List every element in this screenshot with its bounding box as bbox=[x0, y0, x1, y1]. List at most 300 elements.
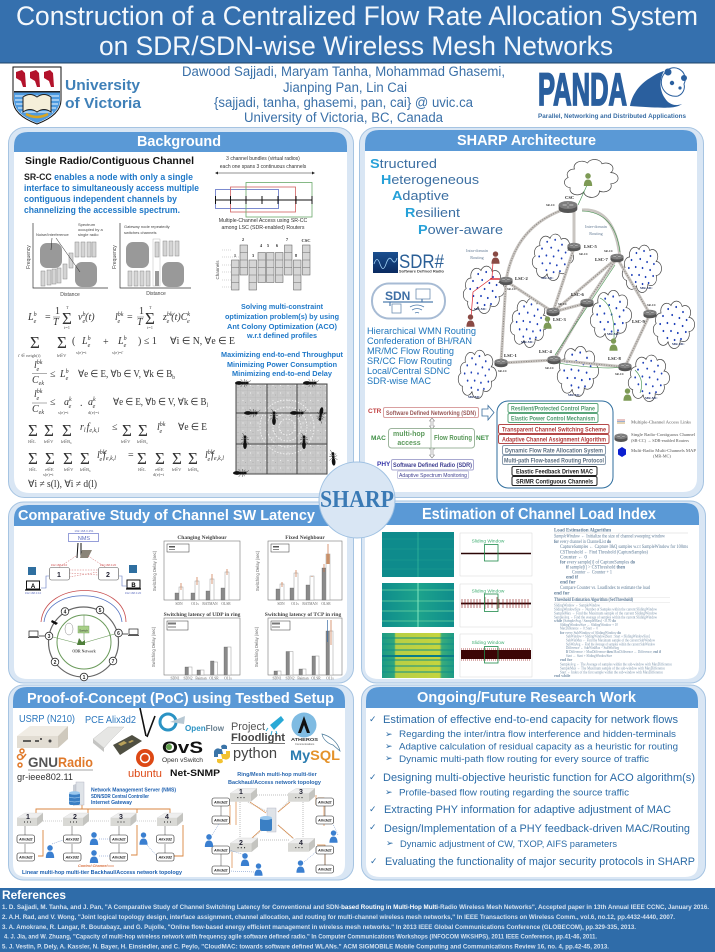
logo: GNU Radio: Radio bbox=[58, 754, 93, 770]
heading: Estimation of Channel Load Index bbox=[422, 506, 656, 523]
chart: noise and interference spectrum: occupied by a bbox=[78, 227, 103, 232]
equations: d(e)=i bbox=[88, 410, 100, 415]
chart: gateway channel switching: switches channels bbox=[124, 230, 156, 235]
chart: channel allocation: 2 bbox=[242, 237, 245, 242]
text block: load estimation algorithm bbox=[554, 528, 688, 596]
text block: threshold estimation algorithm: Start ← Index of the first sample within the sub-window with MaxDifference bbox=[560, 670, 663, 674]
equations: ek bbox=[39, 410, 44, 416]
chart: TCP latency: Switching latency of TCP in ring bbox=[265, 612, 341, 618]
logo: Atheros: ATHEROS bbox=[291, 737, 318, 742]
network diagram: SR-CC bbox=[558, 302, 567, 306]
reference list: 3. A. Amokrane, R. Langar, R. Boutabayz, and G. Pujolle, "Online flow-based energy efficient management in wireless mesh networks." In 2013 IEEE Global Communications Conference (GLOBECOM), pp.329-335, 2013. bbox=[2, 924, 636, 931]
list: research items: ✓ bbox=[370, 856, 378, 866]
diagram: ring mesh topology: Alix3d2 bbox=[317, 800, 332, 804]
equations: a bbox=[88, 397, 93, 408]
diagram: protocol stack: Flow Routing bbox=[434, 435, 472, 442]
network diagram: SR-CC bbox=[604, 249, 613, 253]
logo: Project Floodlight: Project bbox=[231, 721, 265, 733]
equations: v bbox=[78, 312, 82, 323]
list: research items: Design/Implementation of a PHY feedback-driven MAC/Routing bbox=[384, 823, 690, 835]
equations: b∈V bbox=[64, 467, 74, 472]
text block: capabilities: Confederation of BH/RAN bbox=[367, 336, 472, 346]
chart: channel allocation: 4 bbox=[260, 243, 263, 248]
text block: threshold estimation algorithm: MaxDifference ← 0; Start ← 0 bbox=[560, 626, 598, 630]
acronym text: Resilient bbox=[405, 205, 460, 220]
reference list: 5. J. Vestin, P. Dely, A. Kassler, N. Bayer, H. Einsiedler, and C. Peylo, "CloudMAC: towards software defined WLANs." ACM SIGMOBILE Mobile Computing and Communications Review 16, no. 4, pp.42-45, 2013. bbox=[2, 944, 609, 950]
diagram: NMS testbed: 192.168.0.20 bbox=[125, 591, 142, 595]
equations: Σ bbox=[28, 449, 38, 468]
acronym text: Power-aware bbox=[418, 222, 503, 237]
text block: optimization: Ant Colony Optimization (ACO) bbox=[227, 322, 337, 331]
logo: PANDA: Parallel, Networking and Distributed Applications bbox=[538, 114, 687, 120]
panel: estimation of channel load index bbox=[362, 501, 706, 683]
diagram: ring mesh topology: Alix3d2 bbox=[213, 868, 228, 872]
logo: SDN bbox=[372, 284, 445, 318]
text block: load estimation algorithm: for every channel in ChannelList do bbox=[554, 540, 611, 545]
equations: ek bbox=[39, 381, 44, 387]
diagram: protocol stack: Software Defined Radio (SDR) bbox=[393, 463, 472, 469]
chart: channel allocation: 5 bbox=[267, 243, 270, 248]
equations: 1 bbox=[139, 306, 144, 317]
text block: capabilities: SDR-wise MAC bbox=[367, 376, 431, 386]
plot: sliding window idle: Sliding Window bbox=[472, 538, 505, 544]
chart: UDP latency: SDN2 bbox=[184, 676, 193, 680]
equations: k bbox=[93, 397, 96, 403]
equations: f bbox=[87, 422, 91, 433]
feature stack: Multi-path Flow-based Routing Protocol bbox=[504, 458, 604, 464]
feature stack: Elastic Power Control Mechanism bbox=[511, 416, 595, 422]
chart: noise and interference spectrum: Frequency bbox=[26, 245, 32, 269]
hardware labels: USRP (N210) bbox=[19, 714, 75, 725]
diagram: protocol stack bbox=[368, 406, 494, 479]
diagram: ring mesh topology: Alix3d2 bbox=[213, 800, 228, 804]
network diagram: SR-CC bbox=[579, 252, 588, 256]
heading: SHARP Architecture bbox=[457, 133, 596, 149]
logo: SDN: SDN bbox=[385, 289, 410, 303]
equations: e bbox=[207, 457, 210, 463]
equations: l bbox=[34, 389, 37, 400]
plot: sliding window idle bbox=[460, 533, 532, 576]
chart: changing neighbour bbox=[152, 535, 240, 606]
equations: . bbox=[80, 398, 82, 409]
diagram: linear topology bbox=[17, 782, 183, 876]
diagram: channel bundles: Multiple-Channel Access using SR-CC bbox=[219, 218, 308, 224]
text block: SR-CC description: SR-CC enables a node with only a single bbox=[24, 172, 193, 182]
chart: changing neighbour: O11s bbox=[191, 602, 199, 606]
title band bbox=[0, 0, 715, 64]
chart: gateway channel switching: Distance bbox=[146, 291, 166, 297]
equations: e,k,l bbox=[214, 456, 224, 462]
diagram: channel bundles: each one spans 3 continuous channels bbox=[220, 164, 307, 170]
list: research items: Profile-based flow routing regarding the source traffic bbox=[399, 788, 629, 798]
diagram: ring network: Switch bbox=[79, 628, 88, 632]
chart: fixed neighbour: Switching Delay (sec) bbox=[255, 550, 260, 591]
equations: bk bbox=[118, 312, 124, 318]
logo: University of Victoria: of Victoria bbox=[65, 95, 142, 112]
diagram: linear topology: Alix3d2 bbox=[18, 856, 33, 860]
diagram: ring mesh topology: 2 bbox=[239, 840, 243, 847]
diagram: linear topology: Control Channel bbox=[78, 864, 108, 868]
equations: e bbox=[124, 343, 127, 349]
equations: e bbox=[159, 429, 162, 435]
acronym text: Heterogeneous bbox=[381, 172, 480, 187]
chart: changing neighbour: SDN bbox=[175, 602, 183, 606]
text block: load estimation algorithm: Compare Counter vs. LoadIndex to estimate the load bbox=[560, 586, 650, 591]
chart: UDP latency: O11s bbox=[224, 676, 232, 680]
text block: objectives bbox=[221, 350, 343, 378]
text block: objectives: Minimizing Power Consumption bbox=[227, 360, 337, 369]
equations: + bbox=[103, 337, 109, 348]
title bbox=[16, 1, 698, 61]
hardware labels: PCE Alix3d2 bbox=[85, 715, 136, 726]
heading: Comparative Study of Channel SW Latency bbox=[18, 508, 315, 524]
equations: = bbox=[128, 450, 134, 461]
chart: ant colony grid bbox=[233, 379, 338, 477]
badge: SHARP: SHARP bbox=[320, 487, 394, 513]
text block: threshold estimation algorithm: end while bbox=[554, 673, 571, 678]
equations: b bbox=[89, 469, 91, 473]
equations: bk bbox=[160, 422, 166, 428]
equations: b∈V bbox=[121, 439, 131, 444]
chart: TCP latency: Switching Delay (sec) bbox=[254, 626, 259, 667]
logo: GNU Radio bbox=[17, 749, 93, 782]
authors: Jianping Pan, Lin Cai bbox=[283, 80, 407, 95]
legend bbox=[614, 420, 697, 458]
authors: {sajjadi, tanha, ghasemi, pan, cai} @ uvic.ca bbox=[214, 95, 473, 110]
equations: e bbox=[36, 396, 39, 402]
text block: threshold estimation algorithm: while (SampleAvg / SampleMax) <0.70 do bbox=[554, 618, 616, 623]
logo: SDR# bbox=[373, 252, 445, 274]
acronym text bbox=[370, 156, 503, 237]
network diagram: MR-MC bbox=[474, 307, 487, 311]
spectrogram: sparse traffic bbox=[382, 583, 454, 627]
list: research items: ➢ bbox=[386, 838, 394, 848]
text block: load estimation algorithm: CSThreshold ← Find Threshold (CaptureSamples) bbox=[560, 550, 648, 556]
equations bbox=[18, 305, 235, 490]
panel: ongoing future research work bbox=[362, 685, 706, 880]
text block: optimization: w.r.t defined profiles bbox=[246, 331, 317, 340]
equations: C bbox=[32, 404, 39, 415]
diagram: NMS testbed: A bbox=[31, 584, 36, 590]
equations: b∈V bbox=[172, 467, 182, 472]
legend: Multi-Radio Multi-Channels MAP bbox=[631, 448, 697, 453]
chart: channel allocation: 8 bbox=[295, 253, 298, 258]
equations: s(e)=i bbox=[58, 410, 69, 415]
text block: capabilities: Hierarchical WMN Routing bbox=[367, 326, 476, 336]
diagram: linear topology: 3 bbox=[119, 814, 123, 821]
chart: channel allocation: 1 bbox=[234, 253, 237, 258]
list: research items: Dynamic adjustment of CW, TXOP, AIFS parameters bbox=[400, 839, 617, 850]
chart: changing neighbour: Changing Neighbour bbox=[177, 535, 227, 541]
equations: Σ bbox=[188, 449, 198, 468]
network diagram: MR-MC bbox=[568, 393, 581, 397]
equations: k∈B bbox=[61, 439, 70, 444]
network diagram: LSC-2 bbox=[515, 276, 528, 281]
diagram: linear topology: Alix3d2 bbox=[158, 838, 173, 842]
text block: threshold estimation algorithm: If Difference > MaxDifference then MaxDifference ← Difference; end if bbox=[566, 649, 662, 654]
heading: Ongoing/Future Research Work bbox=[417, 690, 637, 706]
equations: Σ bbox=[57, 333, 67, 352]
diagram: linear topology: 1 bbox=[26, 814, 30, 821]
text block: threshold estimation algorithm: SampleMax ← Find the Maximum sample of the current SlidingWindow bbox=[554, 610, 657, 616]
diagram: ring network: ODR Network bbox=[72, 650, 97, 654]
diagram: channel bundles bbox=[215, 156, 315, 231]
icon: Alix router board bbox=[93, 708, 155, 755]
authors: Dawood Sajjadi, Maryam Tanha, Mohammad Ghasemi, bbox=[182, 64, 505, 79]
text block: load estimation algorithm: CaptureSamples ← Capture I&Q samples w.r.t SampleWindow for 100ms bbox=[560, 545, 688, 550]
diagram: linear topology: Linear multi-hop multi-tier Backhaul/Access network topology bbox=[22, 870, 183, 876]
diagram: NMS testbed: NMS bbox=[78, 536, 90, 542]
text block: SR-CC description: interface to simultaneously access multiple bbox=[24, 183, 199, 193]
feature stack: Adaptive Channel Assignment Algorithm bbox=[502, 438, 606, 444]
reference list: 4. J. Jia, and W. Zhuang, "Capacity of multi-hop wireless network with frequency agile software defined radio." In Computer Communications Workshops (INFOCOM WKSHPS), 2011 IEEE Conference, pp.41-46, 2011. bbox=[4, 934, 597, 940]
equations: b bbox=[66, 369, 69, 375]
equations: bk bbox=[100, 450, 106, 456]
diagram: linear topology: Alix3d2 bbox=[18, 838, 33, 842]
equations: k bbox=[187, 312, 190, 318]
logo: ubuntu bbox=[128, 749, 162, 780]
equations: e,k,l bbox=[89, 428, 100, 434]
text block: optimization bbox=[225, 302, 339, 340]
list: research items: Estimation of effective end-to-end capacity for network flows bbox=[383, 714, 678, 726]
logo: MySQL bbox=[290, 734, 340, 763]
list: research items: Designing multi-objective heuristic function for ACO algorithm(s) bbox=[383, 772, 695, 784]
text block: objectives: Minimizing end-to-end Delay bbox=[232, 369, 333, 378]
diagram: protocol stack: Software Defined Networking (SDN) bbox=[386, 411, 476, 417]
network diagram: Routing bbox=[589, 231, 604, 236]
diagram: NMS testbed: 192.168.0.20 bbox=[100, 563, 117, 567]
chart: TCP latency: O11s bbox=[326, 676, 334, 680]
equations: e,k,l bbox=[106, 456, 116, 462]
chart: changing neighbour: OLSR bbox=[221, 602, 231, 606]
text block: load estimation algorithm: SampleWindow ← Initialize the size of channel sweeping window bbox=[554, 534, 665, 540]
diagram: linear topology: Alix3d2 bbox=[64, 856, 80, 860]
diagram: ring mesh topology bbox=[205, 788, 338, 876]
list: research items: ✓ bbox=[369, 772, 377, 782]
text block: optimization: optimization problem(s) by using bbox=[225, 312, 339, 321]
equations: e∈E bbox=[155, 467, 164, 472]
diagram: NMS testbed: 1 bbox=[57, 572, 61, 579]
list: research items: ➢ bbox=[385, 729, 393, 739]
equations: l∈L bbox=[138, 467, 146, 472]
diagram: ring mesh topology: Alix3d2 bbox=[213, 818, 228, 822]
panel: proof of concept bbox=[8, 685, 354, 880]
diagram: protocol stack: Adaptive Spectrum Monitoring bbox=[399, 473, 467, 479]
equations: l bbox=[157, 422, 160, 433]
logo: Atheros: Communications bbox=[295, 742, 315, 746]
reference list: 2. A.H. Rad, and V. Wong, "Joint logical topology design, interface assignment, channel allocation, and routing for multi-channel wireless mesh networks," In IEEE Transactions on Wireless Comm., vol.6, no.12, pp.4432-4440, 2007. bbox=[2, 914, 675, 921]
text block: ring topology title: Ring/Mesh multi-hop multi-tier bbox=[237, 772, 318, 778]
network diagram bbox=[458, 160, 695, 402]
equations: i' ∈ neigh(i) bbox=[18, 353, 41, 358]
subheading: Single Radio/Contiguous Channel bbox=[25, 155, 194, 167]
chart: TCP latency: Baiman bbox=[297, 676, 309, 680]
feature stack: Resilient/Protected Control Plane bbox=[511, 406, 596, 412]
chart: fixed neighbour bbox=[255, 535, 342, 606]
text block: threshold estimation algorithm: SlidingWindowSize ← Number of Samples within the current SlidingWindow bbox=[554, 606, 657, 612]
network diagram: MR-MC bbox=[541, 276, 554, 280]
equations: e bbox=[99, 457, 102, 463]
equations: ∀i ∈ N, ∀e ∈ E bbox=[170, 336, 235, 347]
logo: SDR#: Software Defined Radio bbox=[399, 270, 445, 274]
logo: MySQL: MySQL bbox=[290, 747, 340, 763]
equations: Σ bbox=[28, 421, 38, 440]
text block: capabilities: Local/Central SDNC bbox=[367, 366, 450, 376]
list: research items: Evaluating the functionality of major security protocols in SHARP bbox=[385, 856, 695, 868]
chart: channel allocation: CSC bbox=[301, 238, 311, 243]
equations: e bbox=[69, 404, 72, 410]
logo: Open vSwitch bbox=[162, 738, 203, 764]
equations: L bbox=[118, 336, 124, 347]
list: research items bbox=[369, 714, 695, 868]
diagram: linear topology: Internet Gateway bbox=[91, 800, 133, 806]
diagram: ring network: 7 bbox=[112, 659, 115, 665]
chart: TCP latency: OLSR bbox=[311, 676, 321, 680]
network diagram: MR-MC bbox=[468, 395, 481, 399]
chart: changing neighbour: Switching Delay (sec) bbox=[152, 550, 157, 591]
logo: GNU Radio: GNU bbox=[28, 754, 58, 770]
equations: Σ bbox=[155, 449, 165, 468]
diagram: NMS testbed: 2 bbox=[106, 572, 110, 579]
diagram: linear topology: Network Management Server (NMS) bbox=[91, 788, 176, 794]
equations: t=1 bbox=[64, 325, 70, 330]
equations: ) ≤ 1 bbox=[138, 336, 157, 347]
plot: sliding window sparse: Sliding Window bbox=[472, 588, 505, 594]
equations: b∈V bbox=[57, 353, 67, 358]
chart: noise and interference spectrum: single radio bbox=[78, 232, 99, 237]
equations: k∈B bbox=[137, 439, 146, 444]
text block: threshold estimation algorithm: Threshold Estimation Algorithm (SetThreshold) bbox=[554, 598, 633, 603]
equations: b bbox=[172, 375, 175, 381]
reference list: 1. D. Sajjadi, M. Tanha, and J. Pan, "A Comparative Study of Channel Switching Latency for Conventional and SDN-based Routing in Multi-Hop Multi-Radio Wireless Mesh Networks", Accepted paper in 13th Annual IEEE CCNC, January 2016. bbox=[2, 904, 709, 911]
panel: background bbox=[8, 128, 354, 498]
network diagram: LSC-4 bbox=[539, 349, 552, 354]
logo: python: python bbox=[233, 746, 277, 762]
diagram: linear topology: SDN/SDR Central Controller bbox=[91, 794, 150, 800]
diagram: ring network: 1 bbox=[83, 675, 86, 681]
plot: sliding window heavy: Sliding Window bbox=[472, 640, 505, 646]
text block: load estimation algorithm: Counter ← Counter + 1 bbox=[572, 570, 612, 576]
list: research items: ➢ bbox=[385, 741, 393, 751]
network diagram: SR-CC bbox=[507, 287, 516, 291]
title: on SDR/SDN-wise Wireless Mesh Networks bbox=[99, 31, 613, 61]
diagram: NMS testbed: 192.168.0.10 bbox=[25, 591, 42, 595]
equations: b bbox=[70, 441, 72, 445]
authors bbox=[182, 64, 505, 125]
equations: l bbox=[115, 312, 118, 323]
network diagram: Inter-domain bbox=[585, 224, 608, 229]
icon: central server bbox=[260, 808, 276, 832]
equations: t=1 bbox=[147, 325, 153, 330]
equations: ∀e ∈ E, ∀b ∈ V, ∀k ∈ B bbox=[113, 397, 218, 408]
chart: gateway channel switching: Frequency bbox=[112, 245, 118, 269]
diagram: NMS testbed: B bbox=[131, 583, 136, 589]
label: Net-SNMP: Net-SNMP bbox=[170, 768, 221, 779]
network diagram: LSC-5 bbox=[584, 244, 597, 249]
badge: SHARP bbox=[319, 462, 395, 538]
diagram: ring mesh topology: Alix3d2 bbox=[317, 868, 332, 872]
authors: University of Victoria, BC, Canada bbox=[244, 110, 443, 125]
equations: ≤ bbox=[50, 397, 56, 408]
equations: bk bbox=[37, 389, 43, 395]
list: research items: ✓ bbox=[369, 822, 377, 832]
equations: s(e)=i bbox=[76, 350, 87, 355]
network diagram: MR-MC bbox=[521, 340, 534, 344]
network diagram: SR-CC bbox=[498, 369, 507, 373]
text block: threshold estimation algorithm: SubWindow = SlidingWindow[Start : Start + SlidingWindowSize] bbox=[566, 634, 651, 638]
equations: L bbox=[60, 369, 66, 380]
references bbox=[0, 888, 715, 952]
text block: threshold estimation algorithm: SlidingWindow ← SampleWindow bbox=[554, 602, 600, 608]
logo: Open vSwitch: OvS bbox=[162, 738, 203, 757]
acronym text: Structured bbox=[370, 156, 437, 171]
diagram: linear topology: Alix3d2 bbox=[64, 838, 80, 842]
chart: UDP latency: SDN1 bbox=[170, 676, 180, 680]
text block: load estimation algorithm: if sample[i] > CSThreshold then bbox=[566, 566, 625, 570]
text block: SR-CC description: channelizing the accessible spectrum. bbox=[24, 205, 180, 215]
equations: s(e)=i' bbox=[112, 350, 124, 355]
chart: channel allocation: Channels bbox=[215, 260, 220, 280]
chart: noise and interference spectrum bbox=[26, 222, 108, 298]
chart: UDP latency bbox=[151, 612, 241, 680]
equations: Σ bbox=[30, 333, 40, 352]
text block: objectives: Maximizing end-to-end Throughput bbox=[221, 350, 343, 359]
equations: b bbox=[197, 469, 199, 473]
heading: Background bbox=[137, 133, 221, 150]
equations: k∈B bbox=[80, 467, 89, 472]
text block: threshold estimation algorithm: SampleMax ← The Maximum sample of the sub-window with MaxDifference bbox=[560, 666, 665, 670]
diagram: linear topology: Alix3d2 bbox=[111, 856, 126, 860]
equations: f bbox=[103, 450, 107, 461]
feature stack bbox=[497, 401, 613, 488]
chart: UDP latency: OLSR bbox=[209, 676, 219, 680]
chart: noise and interference spectrum: Distance bbox=[60, 292, 80, 298]
equations: e∈E bbox=[45, 467, 54, 472]
feature stack: Dynamic Flow Rate Allocation System bbox=[505, 448, 603, 454]
reference list bbox=[2, 904, 709, 950]
equations: b bbox=[124, 336, 127, 342]
equations: ≤ bbox=[50, 369, 56, 380]
logo: PANDA: PANDA bbox=[538, 64, 627, 115]
acronym text: Adaptive bbox=[392, 188, 449, 203]
feature stack: Transparent Channel Switching Scheme bbox=[502, 428, 607, 434]
equations: e bbox=[82, 319, 85, 325]
text block: load estimation algorithm: end for bbox=[554, 592, 570, 596]
equations: s(e)=i bbox=[43, 472, 54, 477]
chart: channel allocation: 3 bbox=[252, 253, 255, 258]
equations: l∈L bbox=[28, 439, 36, 444]
plot: sliding window sparse bbox=[460, 584, 532, 627]
diagram: protocol stack: MAC bbox=[371, 435, 386, 442]
equations: ∀i ≠ s(l), ∀i ≠ d(l) bbox=[28, 479, 97, 490]
equations: ( bbox=[72, 336, 76, 347]
diagram: protocol stack: PHY bbox=[377, 461, 391, 468]
equations: l bbox=[34, 360, 37, 371]
logo: SDR#: SDR# bbox=[399, 252, 444, 273]
list: research items: ➢ bbox=[385, 787, 393, 797]
list: research items: Extracting PHY information for adaptive adjustment of MAC bbox=[384, 804, 671, 816]
text block: threshold estimation algorithm bbox=[554, 598, 672, 678]
text block: SR-CC description: contiguous independent channels by bbox=[24, 194, 177, 204]
list: research items: Adaptive calculation of residual capacity as a heuristic for routing bbox=[399, 742, 678, 752]
text block: threshold estimation algorithm: SubWinAvg ← Find the Average of samples within the current SubWindow bbox=[566, 642, 655, 646]
equations: Σ bbox=[62, 421, 72, 440]
logo: Atheros bbox=[291, 712, 318, 746]
equations: bk bbox=[167, 312, 173, 318]
plot: sliding window heavy bbox=[460, 634, 532, 677]
text block: threshold estimation algorithm: Difference ← SubWinMax − SubWinAvg bbox=[566, 645, 619, 650]
chart: channel allocation: 7 bbox=[286, 237, 289, 242]
